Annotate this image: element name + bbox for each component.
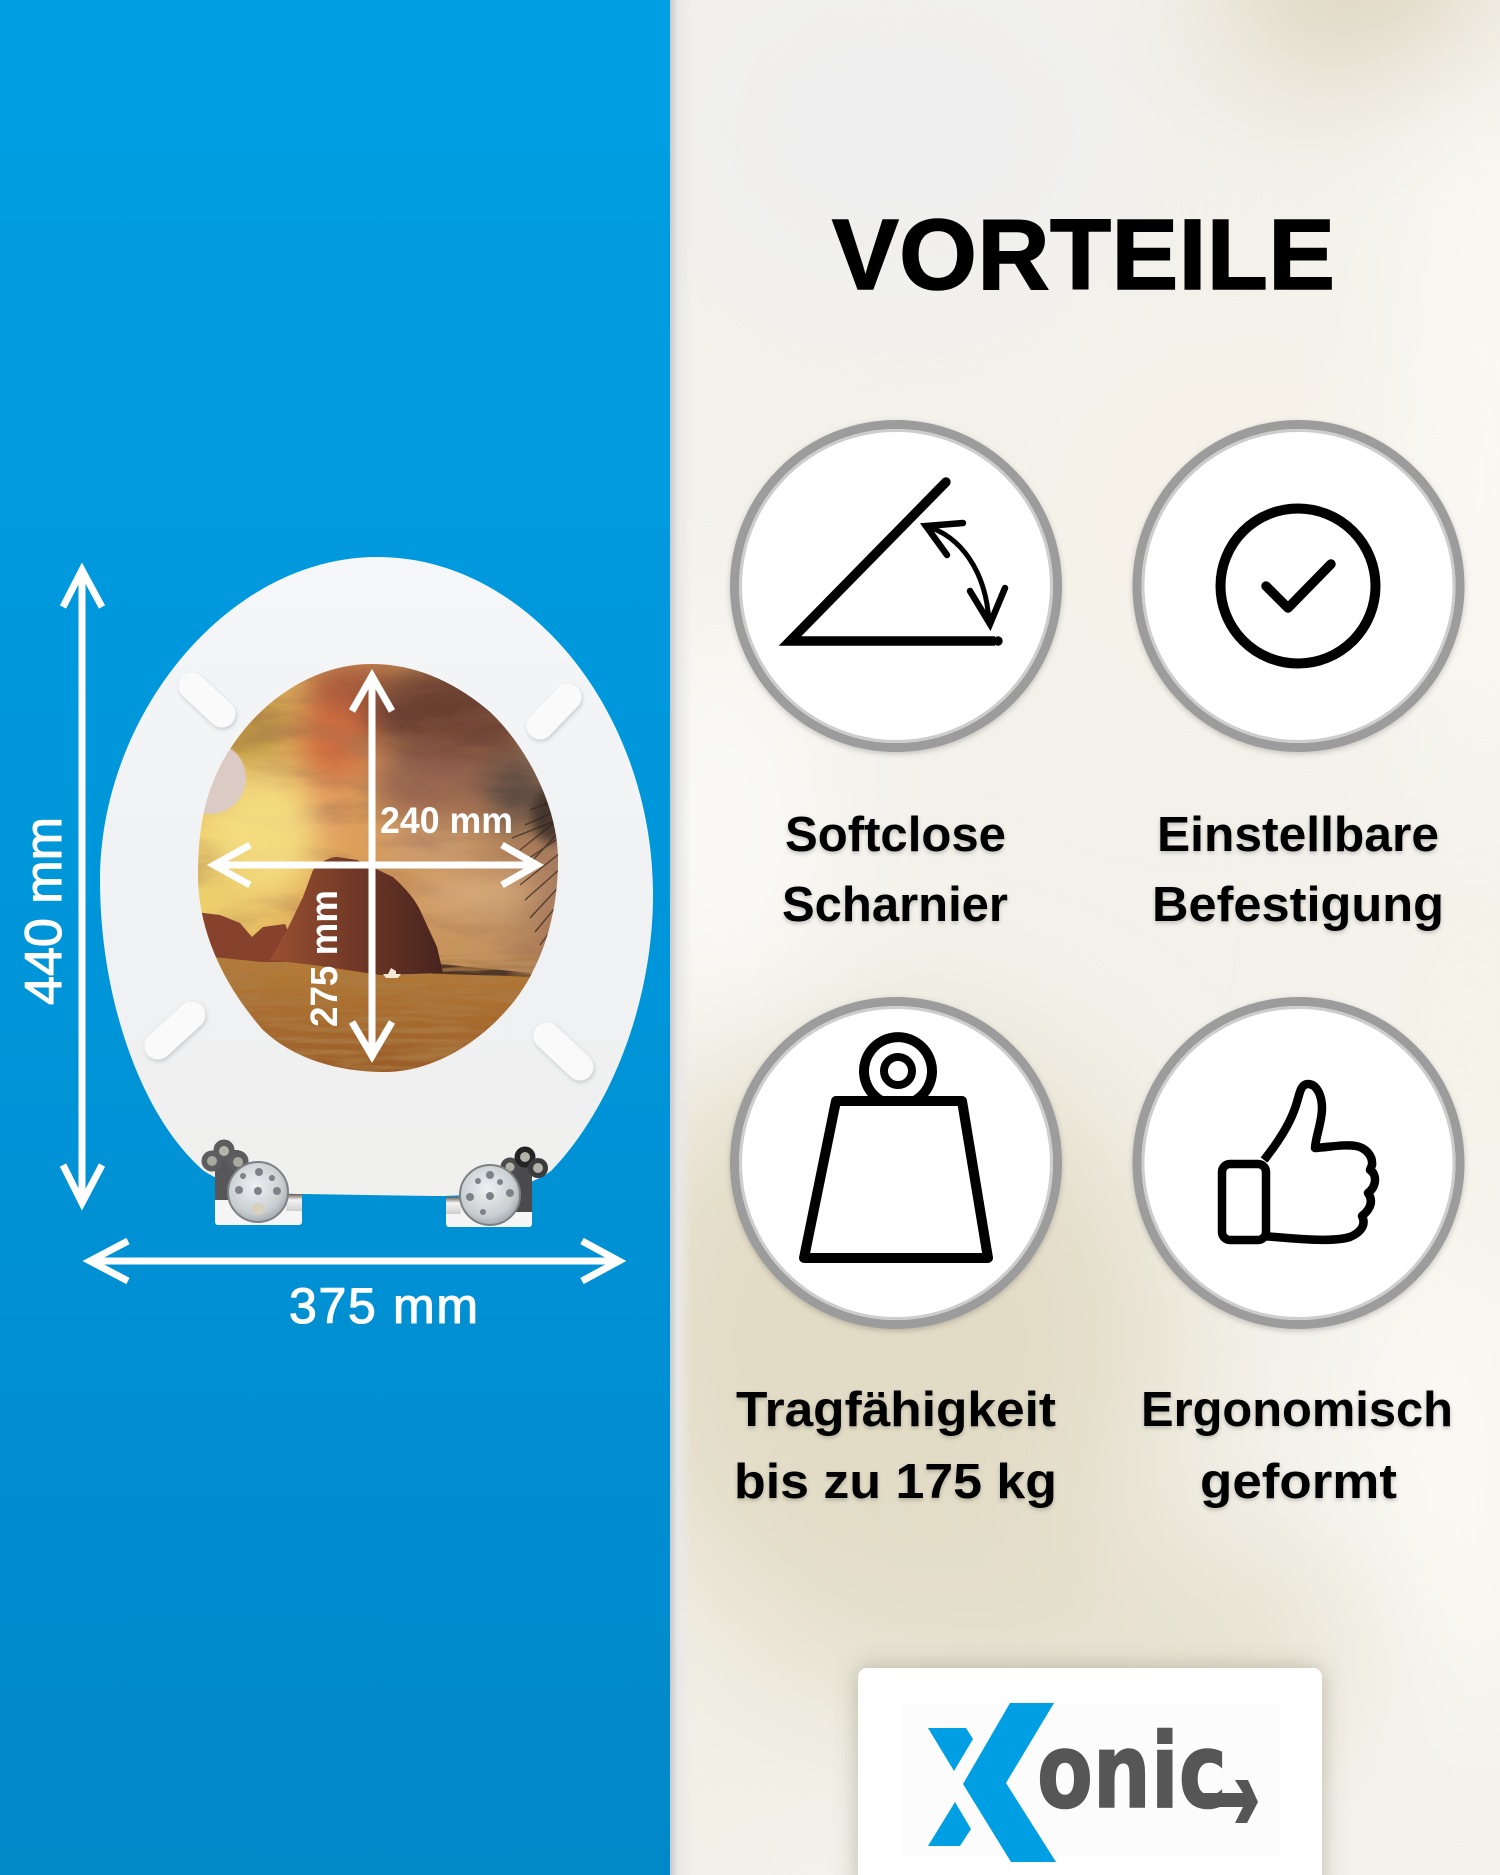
boat (383, 968, 401, 978)
label: Ergonomisch (1141, 1383, 1453, 1437)
hinge right (446, 1146, 548, 1227)
feature: load capacity (734, 1002, 1058, 1509)
arrow: opening width 240 mm (214, 845, 537, 885)
feature: adjustable fastening (1137, 424, 1460, 932)
label (782, 808, 1008, 932)
icon: check in circle (1220, 508, 1376, 664)
arrow: opening height 275 mm (352, 676, 392, 1056)
icon: angle with double arrow (790, 477, 1005, 646)
arrow: seat height 440 mm (63, 570, 102, 1203)
label: 240 mm: 240 mm (380, 800, 513, 841)
label: geformt (1200, 1455, 1397, 1509)
seat lid (100, 557, 653, 1196)
sunset beach motif (198, 664, 558, 1072)
heading: VORTEILE: VORTEILE (832, 199, 1335, 311)
label: 375 mm: 375 mm (289, 1278, 478, 1334)
toilet seat product (100, 557, 653, 1227)
badge circle (734, 1002, 1058, 1324)
badge circle (1137, 1002, 1460, 1324)
panel: left blue background (0, 0, 670, 1875)
label (734, 1383, 1057, 1509)
logo card: Xonic (858, 1668, 1322, 1875)
badge circle (1137, 424, 1460, 748)
feature: ergonomic shape (1137, 1002, 1460, 1509)
logo arrow (1198, 1780, 1258, 1823)
icon: thumbs up (1222, 1084, 1375, 1240)
badge circle (734, 424, 1058, 748)
feature: softclose hinge (734, 424, 1058, 932)
far shore (432, 964, 532, 984)
sun (204, 748, 247, 815)
palm leaves (532, 787, 568, 843)
label: Scharnier (782, 878, 1008, 932)
label: bis zu 175 kg (734, 1455, 1057, 1509)
logo wordmark: onic (1037, 1712, 1227, 1832)
water (214, 953, 530, 1072)
label: Softclose (785, 808, 1006, 862)
label: Befestigung (1152, 878, 1444, 932)
icon: weight (804, 1037, 988, 1258)
label: 275 mm: 275 mm (304, 890, 346, 1027)
label (1152, 808, 1444, 932)
label: Tragfähigkeit (736, 1383, 1056, 1437)
big rock (270, 857, 443, 975)
label: 440 mm: 440 mm (15, 817, 73, 1005)
arrow: seat width 375 mm (90, 1241, 619, 1281)
logo mark X (928, 1703, 1056, 1862)
hinge left (202, 1140, 302, 1225)
rubber bumpers (158, 686, 580, 1067)
small islands (202, 912, 288, 962)
panel: right blurred cream background (682, 0, 1500, 1746)
label (1141, 1383, 1453, 1509)
label: Einstellbare (1157, 808, 1439, 862)
